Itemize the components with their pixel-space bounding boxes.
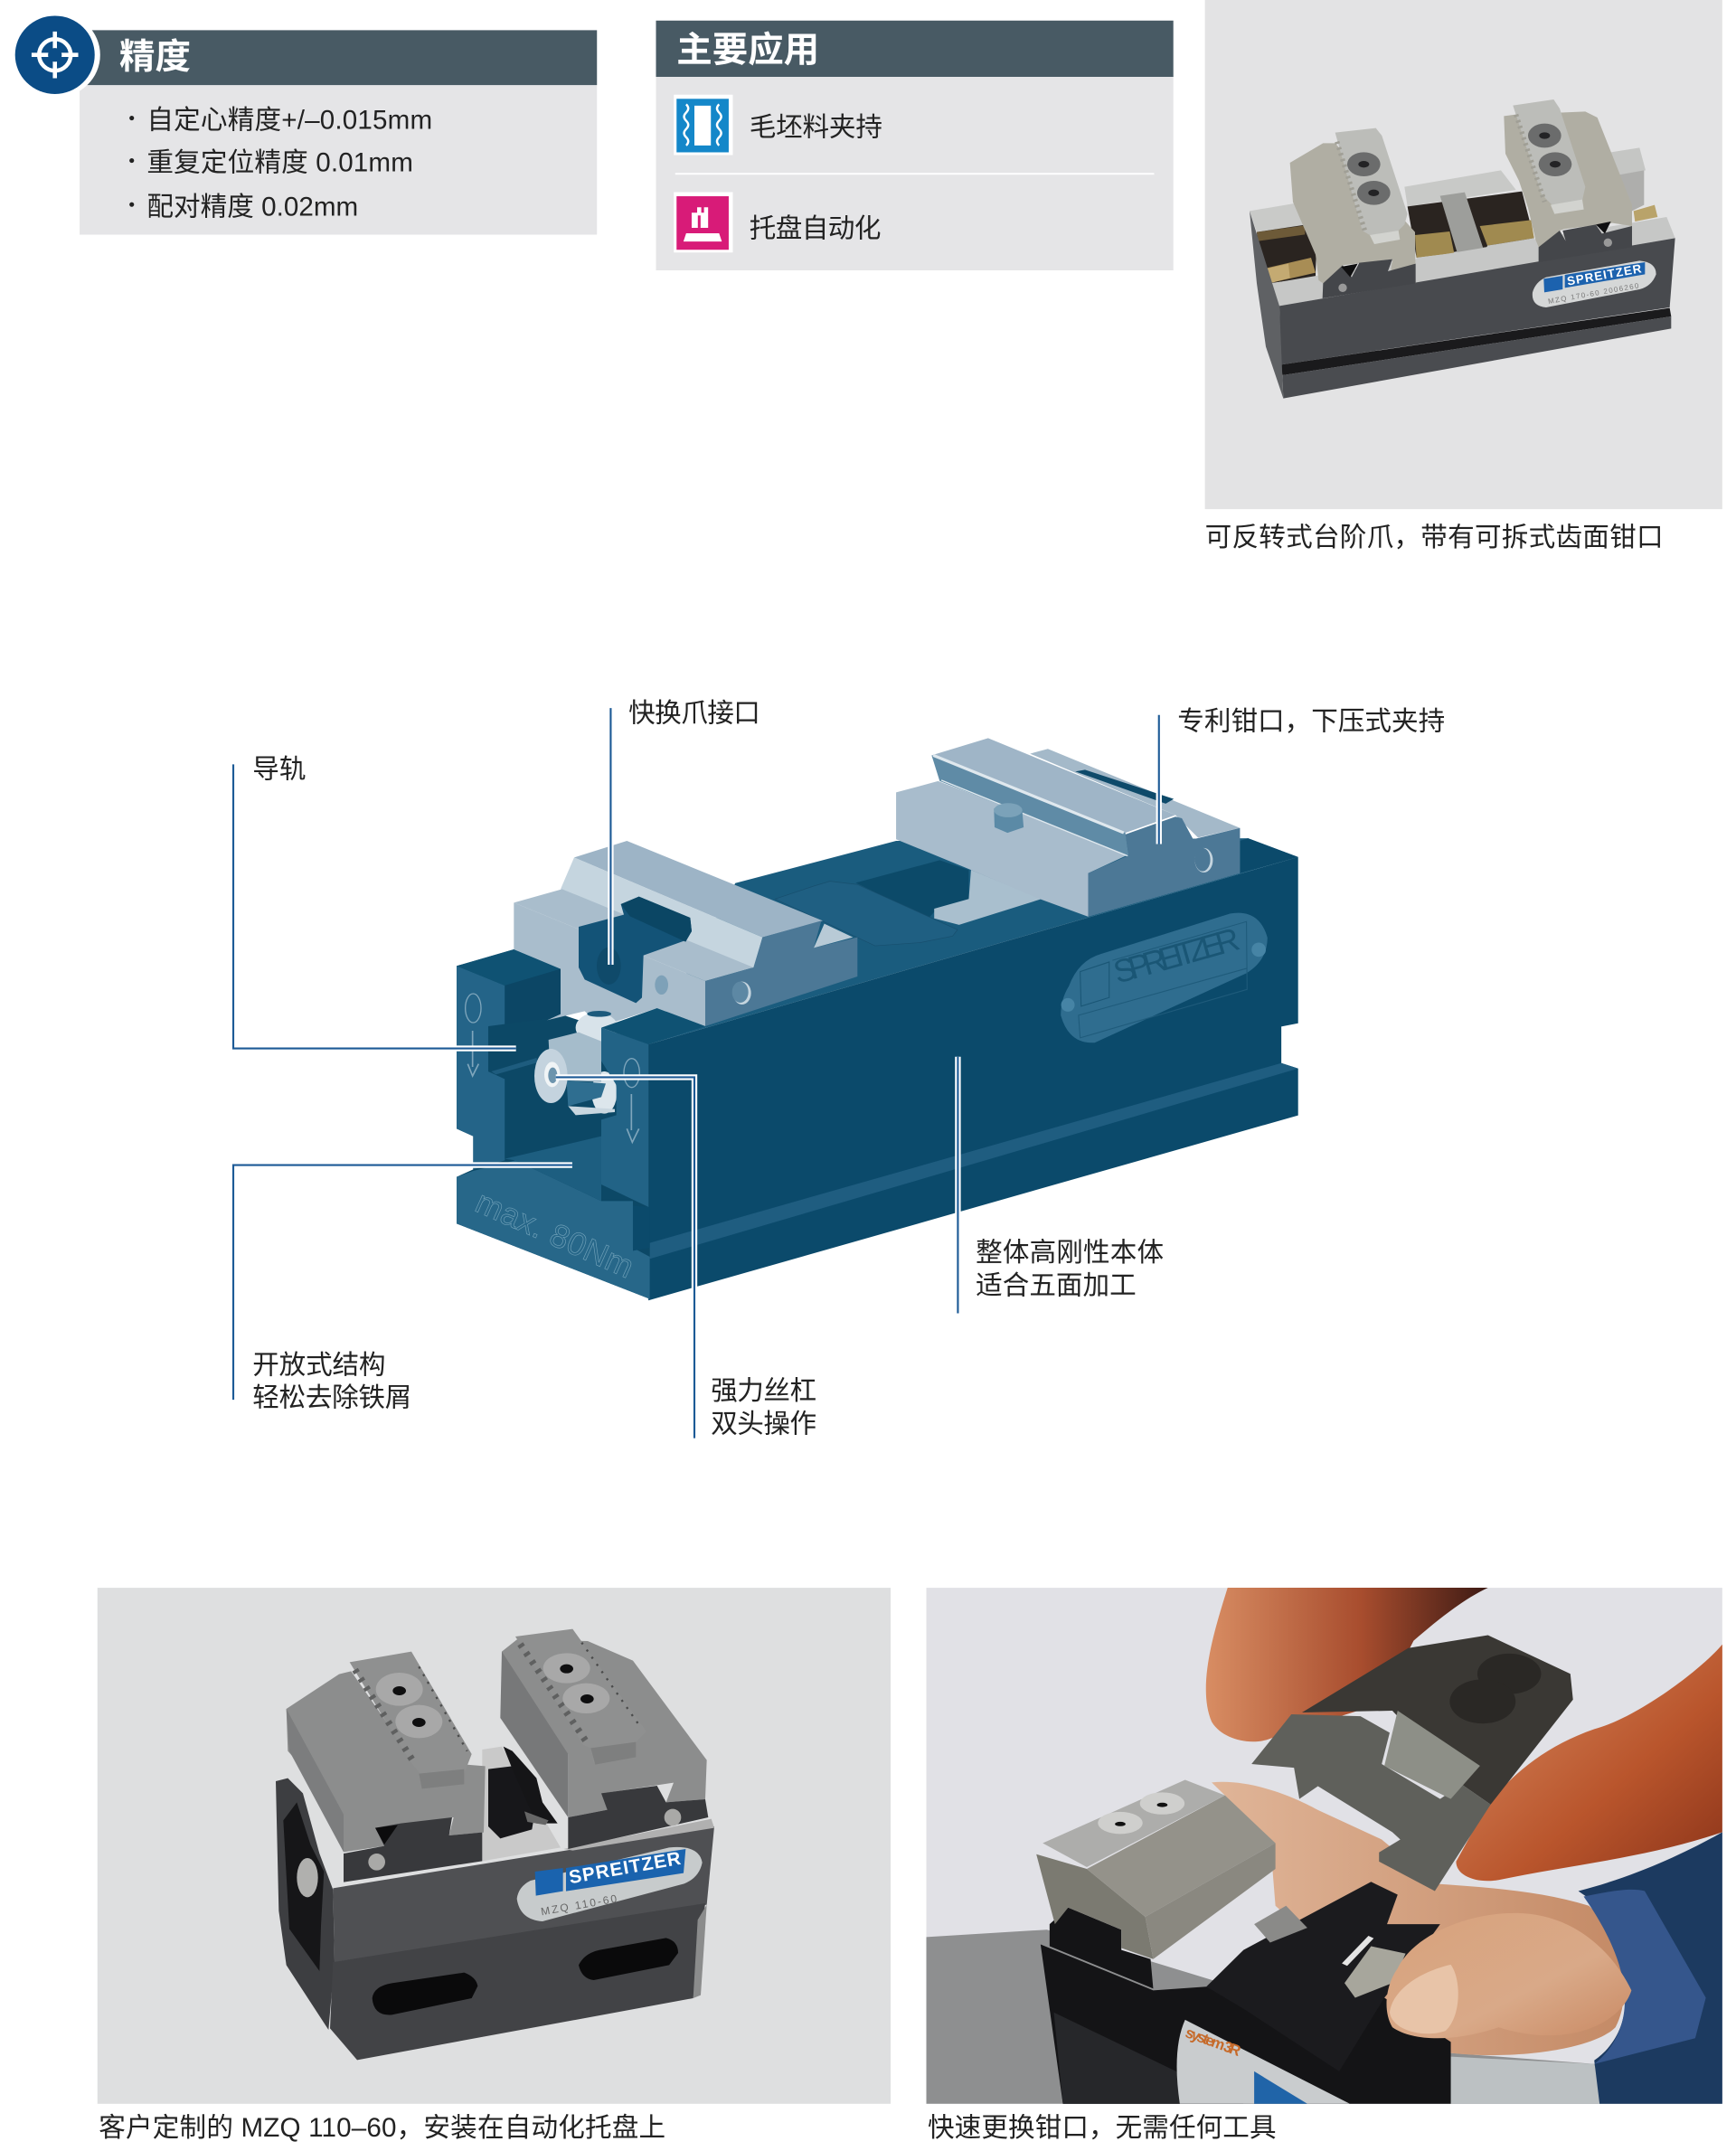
callout: quick-change jaw interface: 快换爪接口 (628, 698, 760, 728)
callout: rigid body: 适合五面加工 (976, 1270, 1137, 1300)
jaw in hand front (1251, 1714, 1491, 1891)
caption: quick jaw change: 快速更换钳口，无需任何工具 (928, 2113, 1277, 2143)
right post (601, 1008, 705, 1044)
panel: precision (13, 13, 597, 235)
front end, front jaw, screw (457, 841, 857, 1299)
rear jaw (896, 781, 1130, 917)
callout: guide rail: 导轨 (252, 755, 306, 785)
callout: rigid body (958, 1057, 1164, 1314)
jaw in hand dark top (1302, 1636, 1573, 1805)
right jaw (500, 1629, 708, 1849)
inner opening (488, 1019, 601, 1159)
nameplate: MZQ 170-60 2006260 (1547, 281, 1640, 306)
applications heading bar (656, 21, 1174, 77)
lower thumb (1387, 1913, 1631, 2038)
caption: reversible step jaw: 可反转式台阶爪，带有可拆式齿面钳口 (1205, 523, 1664, 552)
diagram: vise illustration (457, 738, 1298, 1300)
nameplate: SPREITZER (568, 1848, 683, 1888)
nameplate (1533, 260, 1656, 307)
body, rear jaw (633, 738, 1298, 1300)
nameplate (1061, 913, 1268, 1042)
callout: patented jaw: 专利钳口，下压式夹持 (1177, 706, 1445, 736)
precision bullet list: 重复定位精度 0.01mm (146, 148, 413, 178)
body, rear jaw: SPREITZER (1109, 920, 1243, 991)
left jaw (287, 1652, 486, 1882)
rear centre jaw (1206, 1882, 1440, 2071)
nameplate: MZQ 110-60 (540, 1892, 618, 1918)
right jaw (1504, 99, 1632, 262)
vise body (1041, 1944, 1451, 2104)
callout: rigid body: 整体高刚性本体 (976, 1238, 1164, 1268)
callout: guide rail (233, 755, 516, 1049)
panel: main applications (656, 21, 1174, 270)
photo: quick jaw change by hand: system 3R (1183, 2024, 1243, 2060)
top finger (1206, 1588, 1488, 1741)
callout: lead screw (556, 1077, 816, 1439)
callout: lead screw: 双头操作 (711, 1410, 816, 1439)
sleeve (1579, 1832, 1722, 2104)
photo: MZQ 110-60 on pallet (98, 1588, 891, 2104)
icon: pallet automation (674, 192, 732, 252)
nameplate (517, 1847, 703, 1921)
left jaw (1290, 128, 1416, 298)
callout: lead screw: 强力丝杠 (711, 1376, 816, 1406)
icon: blank clamping (674, 95, 732, 156)
quick-change interface (579, 897, 692, 1003)
left jaw lower (1050, 1908, 1153, 1988)
lead screw (576, 1013, 618, 1042)
upper thumb (1456, 1645, 1722, 1881)
precision bullet list (129, 106, 432, 222)
callout: open structure (233, 1165, 572, 1413)
front end, front jaw, screw: max. 80Nm (470, 1183, 639, 1286)
icon: target (13, 13, 100, 98)
plate (1177, 2020, 1350, 2104)
applications heading: 主要应用 (676, 30, 819, 70)
caption: custom MZQ: 客户定制的 MZQ 110–60，安装在自动化托盘上 (99, 2113, 665, 2143)
arrows (467, 1031, 639, 1142)
front silhouette (457, 949, 650, 1299)
callout: open structure: 开放式结构 (252, 1350, 385, 1380)
centre opening (482, 1747, 561, 1861)
photo: reversible step jaw vise (1205, 0, 1722, 509)
application: blank clamping: 毛坯料夹持 (750, 112, 882, 142)
front jaw (574, 841, 823, 938)
table (927, 1929, 1722, 2104)
nameplate: SPREITZER (1566, 261, 1643, 288)
application: pallet automation: 托盘自动化 (750, 214, 881, 244)
middle fingers and palm (1212, 1782, 1624, 2055)
left jaw (1036, 1854, 1153, 1959)
precision heading: 精度 (119, 37, 191, 77)
precision bullet list: 自定心精度+/–0.015mm (146, 106, 432, 136)
precision bullet list: 配对精度 0.02mm (146, 192, 358, 222)
photo: quick jaw change by hand (927, 1588, 1722, 2104)
precision heading bar (80, 30, 597, 85)
callout: open structure: 轻松去除铁屑 (252, 1383, 411, 1413)
